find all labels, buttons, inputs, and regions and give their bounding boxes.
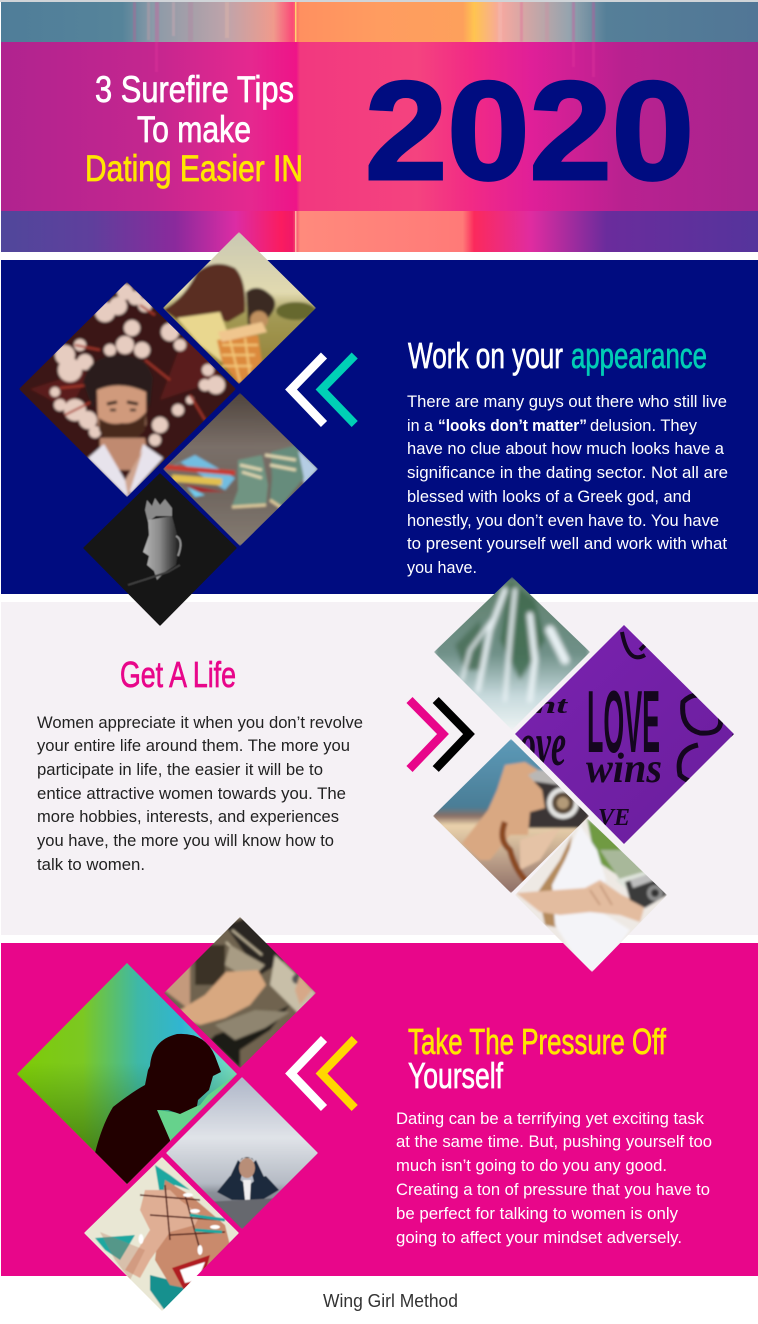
header title: To make	[137, 109, 251, 150]
panel: work on your appearance background	[1, 260, 758, 594]
text block: appearance paragraph: blessed with looks of a Greek god, and	[407, 487, 691, 506]
photo: hands holding camera at beach	[433, 739, 589, 893]
text block: pressure paragraph: going to affect your mindset adversely.	[396, 1228, 682, 1247]
text block: pressure paragraph: Dating can be a terrifying yet exciting task	[396, 1109, 704, 1128]
text block: pressure paragraph: Creating a ton of pressure that you have to	[396, 1180, 710, 1199]
big year 2020: 2020	[365, 52, 694, 209]
text block: get a life paragraph: talk to women.	[37, 855, 145, 874]
photo: silhouette on green and teal gradient	[17, 963, 237, 1184]
text block: appearance paragraph: you have.	[407, 558, 477, 577]
text block: appearance paragraph: have no clue about how much looks have a	[407, 439, 725, 458]
chevrons: section three arrows	[291, 1039, 355, 1108]
header title	[85, 69, 303, 189]
text block: appearance paragraph: significance in the dating sector. Not all are	[407, 463, 728, 482]
heading: work on your appearance: Work on your	[408, 335, 563, 376]
heading: get a life: Get A Life	[120, 654, 236, 695]
photo: man in sea holding head	[166, 1077, 318, 1229]
panel: get a life background	[1, 602, 758, 935]
footer credit: Wing Girl Method	[323, 1291, 458, 1311]
photo: love wins purple wall: nt	[535, 693, 569, 719]
photo: love wins purple wall: wins	[586, 746, 662, 792]
chevrons: section two arrows	[410, 700, 469, 769]
text block: appearance paragraph	[407, 392, 728, 577]
heading: work on your appearance: appearance	[571, 335, 707, 376]
heading: take the pressure off yourself: Take The Pressure Off	[408, 1021, 667, 1062]
panel: take the pressure off background	[1, 943, 758, 1276]
header title: 3 Surefire Tips	[95, 69, 294, 110]
photo: baby shoes	[163, 393, 318, 546]
text block: appearance paragraph: delusion. They	[590, 416, 697, 435]
text block: appearance paragraph: honestly, you don’t even have to. You have	[407, 511, 719, 530]
photo: street art face with hands	[84, 1157, 239, 1311]
text block: pressure paragraph: much isn’t going to do you any good.	[396, 1156, 667, 1175]
photo: waterfall	[434, 577, 590, 730]
photo: woman in white with camera	[515, 818, 667, 972]
text block: pressure paragraph	[396, 1109, 712, 1247]
photo: hands sorting old prints	[164, 917, 316, 1068]
photo: dark man profile	[83, 473, 237, 626]
text block: get a life paragraph: participate in life, the easier it will be to	[37, 760, 323, 779]
header banner	[1, 2, 758, 252]
text block: pressure paragraph: be perfect for talking to women is only	[396, 1204, 678, 1223]
photo: love wins purple wall	[515, 625, 735, 844]
header title: Dating Easier IN	[85, 148, 303, 189]
text block: get a life paragraph: Women appreciate it when you don’t revolve	[37, 713, 363, 732]
photo: love wins purple wall: VE	[598, 805, 630, 831]
text block: pressure paragraph: at the same time. But, pushing yourself too	[396, 1132, 712, 1151]
text block: get a life paragraph	[37, 713, 363, 874]
heading: take the pressure off yourself	[408, 1021, 667, 1096]
photo: couple hugging	[163, 232, 316, 384]
text block: appearance paragraph: There are many guys out there who still live	[407, 392, 727, 411]
photo: man with flowers	[19, 282, 236, 497]
text block: appearance paragraph: to present yourself well and work with what	[407, 534, 727, 553]
photo: love wins purple wall: ove	[519, 711, 566, 779]
text block: get a life paragraph: more hobbies, interests, and experiences	[37, 807, 339, 826]
chevrons: section one arrows	[291, 356, 355, 424]
heading: take the pressure off yourself: Yourself	[408, 1055, 504, 1096]
text block: get a life paragraph: entice attractive women towards you. The	[37, 784, 346, 803]
text block: get a life paragraph: your entire life around them. The more you	[37, 736, 350, 755]
text block: appearance paragraph: in a	[407, 416, 434, 435]
text block: get a life paragraph: you have, the more you will know how to	[37, 831, 334, 850]
text block: appearance paragraph: “looks don’t matter”	[438, 416, 587, 435]
